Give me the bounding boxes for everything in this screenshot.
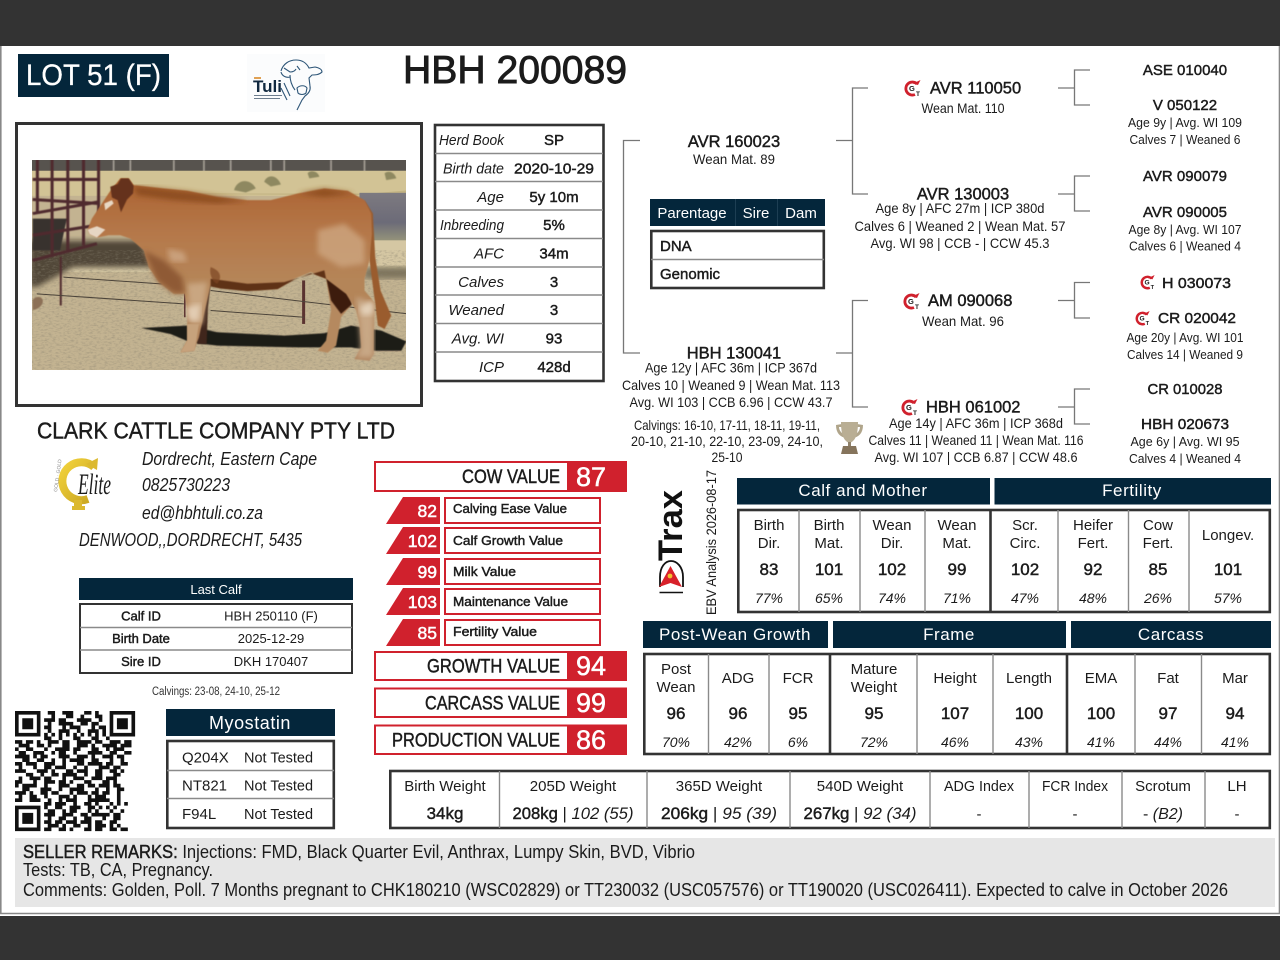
pedigree: sire AVR 160023: AVR 160023	[688, 133, 780, 151]
column: 365D weight: 206kg | 95 (39)	[661, 804, 777, 823]
icon: GT badge: G	[906, 403, 912, 412]
heading: post-wean growth	[643, 621, 828, 648]
panel: herd details table	[435, 125, 604, 381]
column: birth direct: 77%	[755, 590, 783, 606]
heading: carcass	[1071, 621, 1271, 648]
column: ADG	[722, 670, 754, 750]
pedigree: sire AVR 160023	[688, 133, 780, 167]
icon: GT badge	[1137, 311, 1150, 327]
column: FCR index	[1042, 778, 1108, 823]
panel: last calf	[79, 578, 353, 673]
panel: myostatin	[166, 709, 335, 828]
row: AFC	[473, 246, 569, 262]
column: wean direct	[873, 517, 911, 606]
value: fertility: 85	[418, 623, 437, 643]
row: ICP: ICP	[479, 359, 504, 376]
heading: calf and mother: Calf and Mother	[798, 481, 928, 500]
pedigree: AVR 130003: Calves 6 | Weaned 2 | Wean Mat. 57	[854, 218, 1066, 234]
column: height	[933, 670, 978, 750]
pedigree: dam HBH 130041	[622, 344, 840, 410]
column: birth maternal: 65%	[815, 590, 843, 606]
pedigree: HBH 061002: Avg. WI 107 | CCB 6.87 | CCW 48.6	[874, 449, 1078, 465]
panel: last calf: DKH 170407	[234, 654, 308, 669]
pedigree: AVR 090005: Age 8y | Avg. WI 107	[1128, 222, 1242, 237]
pedigree: CR 020042: Calves 14 | Weaned 9	[1127, 347, 1243, 362]
pedigree: HBH 061002: HBH 061002	[926, 398, 1020, 416]
pedigree: V 050122: Age 9y | Avg. WI 109	[1128, 115, 1242, 130]
panel: parentage: Genomic	[660, 266, 721, 283]
shadow	[141, 326, 406, 351]
pedigree: HBH 020673: Calves 4 | Weaned 4	[1129, 451, 1241, 466]
pedigree: AM 090068	[905, 292, 1012, 329]
column: ADG index	[944, 778, 1014, 823]
column: length: 43%	[1015, 734, 1043, 750]
icon: GT badge	[906, 80, 920, 98]
row: ICP: 428d	[537, 359, 571, 376]
value: growth value: 94	[576, 651, 606, 681]
column: scrotum	[1135, 778, 1191, 823]
value: production value	[375, 724, 627, 755]
column: birth maternal: Birth	[814, 517, 844, 534]
pedigree: AVR 130003	[854, 186, 1066, 251]
pedigree: HBH 061002	[868, 398, 1084, 465]
column: scrotal circumference: 102	[1011, 560, 1039, 579]
column: post wean: 96	[667, 704, 685, 723]
panel: myostatin: Not Tested	[244, 807, 313, 823]
value: milk	[386, 558, 600, 585]
column: height: Height	[933, 670, 978, 687]
column: birth direct: Birth	[754, 517, 784, 534]
panel: last calf: Birth Date	[112, 631, 170, 646]
pedigree: AVR 130003: Age 8y | AFC 27m | ICP 380d	[876, 200, 1044, 216]
pedigree: HBH 020673: HBH 020673	[1141, 416, 1229, 433]
column: cow fertility	[1143, 517, 1173, 606]
last calf calvings note: Calvings: 23-08, 24-10, 25-12	[152, 686, 280, 698]
column: 540D weight	[804, 778, 916, 823]
value: production value: PRODUCTION VALUE	[392, 730, 560, 752]
panel: myostatin: Not Tested	[244, 750, 313, 766]
row: average WI: Avg. WI	[451, 330, 504, 348]
column: heifer fertility	[1073, 517, 1113, 606]
value: carcass value: CARCASS VALUE	[425, 694, 560, 714]
pedigree: HBH 020673: Age 6y | Avg. WI 95	[1130, 434, 1240, 449]
row: average WI	[451, 330, 562, 348]
column: post wean: Wean	[657, 679, 695, 696]
row: inbreeding	[440, 217, 565, 234]
pedigree: sire AVR 160023: Wean Mat. 89	[693, 151, 775, 167]
column: scrotal circumference	[1010, 517, 1040, 606]
row: calves	[458, 274, 558, 291]
column: length: 100	[1015, 704, 1043, 723]
icon: GT badge: T	[1146, 321, 1150, 327]
table: weights and indexes	[390, 771, 1270, 828]
column: fat: 97	[1159, 704, 1177, 723]
column: ADG: ADG	[722, 670, 754, 687]
row: weaned: Weaned	[448, 302, 505, 319]
column: LH	[1227, 778, 1247, 823]
pedigree: AVR 110050: AVR 110050	[930, 80, 1021, 98]
icon: GT badge: T	[1151, 285, 1155, 291]
column: scrotal circumference: Circ.	[1010, 535, 1040, 552]
icon: GT badge	[1142, 275, 1155, 291]
row: inbreeding: Inbreeding	[440, 217, 505, 234]
column: scrotum: Scrotum	[1135, 778, 1191, 795]
column: heifer fertility: 92	[1084, 560, 1102, 579]
row: age	[476, 189, 579, 206]
value: fertility	[386, 619, 600, 646]
column: longevity: 101	[1214, 560, 1242, 579]
seller contact details	[79, 449, 317, 550]
column: scrotal circumference: Scr.	[1012, 517, 1038, 534]
column: marbling: Mar	[1222, 670, 1248, 687]
column: scrotum: - (B2)	[1143, 806, 1183, 823]
column: wean maternal: 99	[948, 560, 966, 579]
icon: GT badge: T	[916, 91, 920, 98]
logo: IDTrax	[652, 490, 690, 592]
icon: GT badge	[905, 293, 920, 311]
icon: GT badge: G	[1140, 316, 1145, 323]
logo: IDTrax: Trax	[652, 490, 690, 561]
EBV analysis date: EBV Analysis 2026-08-17	[703, 470, 719, 615]
column: FCR index: FCR Index	[1042, 778, 1108, 795]
pedigree: CR 010028: CR 010028	[1148, 381, 1222, 398]
heading: fertility	[994, 478, 1271, 504]
value: carcass value: 99	[576, 688, 606, 718]
panel: parentage	[650, 199, 825, 288]
bottom dark band	[0, 916, 1280, 960]
seller contact details: Dordrecht, Eastern Cape	[142, 449, 317, 469]
row: inbreeding: 5%	[543, 217, 565, 234]
pedigree: AM 090068: Wean Mat. 96	[922, 313, 1004, 329]
pedigree: H 030073: H 030073	[1162, 275, 1231, 292]
panel: parentage: Dam	[785, 205, 817, 222]
top dark band	[0, 0, 1280, 46]
value: cow value	[375, 461, 627, 492]
row: weaned	[448, 302, 558, 319]
column: ADG index: -	[976, 806, 982, 823]
panel: parentage: Sire	[743, 205, 769, 222]
pedigree: V 050122: V 050122	[1153, 97, 1217, 114]
column: wean maternal: 71%	[943, 590, 971, 606]
column: EMA	[1085, 670, 1117, 750]
pedigree: AVR 090079: AVR 090079	[1143, 168, 1227, 185]
column: heifer fertility: Fert.	[1078, 535, 1108, 552]
column: birth weight: 34kg	[427, 804, 463, 823]
pedigree: V 050122	[1128, 97, 1242, 147]
row: age: Age	[476, 189, 504, 206]
value: calf growth	[386, 527, 600, 554]
row: herd book	[439, 132, 564, 149]
value: maintenance	[386, 588, 600, 615]
panel: last calf: Calf ID	[121, 608, 161, 624]
value: carcass value	[375, 688, 627, 718]
pedigree: CR 020042: CR 020042	[1158, 310, 1236, 327]
column: birth direct: 83	[760, 560, 778, 579]
pedigree: CR 020042	[1126, 310, 1244, 362]
icon: trophy	[836, 422, 863, 454]
column: 540D weight: 267kg | 92 (34)	[804, 804, 916, 823]
QR code	[15, 713, 135, 829]
column: fat: 44%	[1154, 734, 1182, 750]
column: fat	[1154, 670, 1182, 750]
panel: myostatin: Not Tested	[244, 778, 313, 794]
column: birth weight	[404, 778, 487, 823]
column: birth direct	[754, 517, 784, 606]
seller contact details: ed@hbhtuli.co.za	[142, 503, 263, 523]
value: fertility: Fertility Value	[453, 624, 537, 639]
column: mature weight: 72%	[860, 734, 888, 750]
panel: parentage: Parentage	[657, 205, 727, 222]
value: growth value	[375, 651, 627, 681]
column: 205D weight: 205D Weight	[530, 778, 617, 795]
seller contact details: 0825730223	[142, 475, 230, 495]
value: calving ease: 82	[418, 501, 437, 521]
pedigree: AVR 090005: AVR 090005	[1143, 204, 1227, 221]
table: calf, mother and fertility EBVs	[738, 510, 1270, 612]
lot badge: LOT 51 (F)	[26, 59, 161, 92]
pedigree: ASE 010040: ASE 010040	[1143, 62, 1227, 79]
cage	[33, 159, 100, 306]
column: wean direct: Dir.	[881, 535, 903, 552]
pedigree: V 050122: Calves 7 | Weaned 6	[1130, 132, 1240, 147]
value: calving ease: Calving Ease Value	[453, 501, 567, 516]
logo: Elite: Elite	[77, 468, 111, 501]
column: LH: -	[1234, 806, 1240, 823]
column: wean direct: Wean	[873, 517, 911, 534]
value: cow value: COW VALUE	[462, 467, 560, 488]
row: herd book: Herd Book	[439, 132, 505, 149]
heading: carcass: Carcass	[1138, 625, 1204, 644]
row: ICP	[479, 359, 571, 376]
panel: last calf: Last Calf	[190, 582, 242, 597]
dam calving history: Calvings: 16-10, 17-11, 18-11, 19-11,	[634, 417, 820, 433]
column: heifer fertility: 48%	[1079, 590, 1107, 606]
pedigree: HBH 061002: Age 14y | AFC 36m | ICP 368d	[889, 415, 1063, 431]
column: 205D weight: 208kg | 102 (55)	[512, 804, 634, 823]
tail	[364, 200, 391, 329]
far legs	[197, 284, 211, 344]
logo: Elite	[53, 458, 111, 510]
row: average WI: 93	[546, 330, 562, 348]
column: ADG: 96	[729, 704, 747, 723]
column: wean direct: 102	[878, 560, 906, 579]
icon: GT badge	[903, 399, 918, 417]
pedigree: AVR 110050	[906, 80, 1021, 116]
column: height: 107	[941, 704, 969, 723]
column: FCR: 95	[789, 704, 807, 723]
body	[88, 178, 375, 361]
icon: GT badge: T	[913, 410, 917, 417]
row: calves: 3	[550, 274, 558, 291]
column: 540D weight: 540D Weight	[817, 778, 904, 795]
column: ADG index: ADG Index	[944, 778, 1014, 795]
pedigree: HBH 061002: Calves 11 | Weaned 11 | Wean Mat. 116	[868, 432, 1084, 448]
pedigree: AVR 090005: Calves 6 | Weaned 4	[1129, 238, 1241, 254]
heading: frame: Frame	[923, 625, 975, 644]
column: height: 46%	[941, 734, 969, 750]
pedigree: AM 090068: AM 090068	[928, 292, 1012, 310]
logo: Tuli cattle: Tuli	[253, 77, 282, 96]
column: birth maternal	[814, 517, 844, 606]
pedigree connector lines	[624, 70, 1090, 424]
icon: GT badge: G	[908, 297, 914, 306]
table: growth, frame and carcass EBVs	[644, 654, 1270, 754]
value: growth value: GROWTH VALUE	[427, 656, 560, 678]
pedigree: AVR 130003: AVR 130003	[917, 186, 1009, 204]
row: age: 5y 10m	[529, 189, 579, 206]
pedigree: dam HBH 130041: Calves 10 | Weaned 9 | Wean Mat. 113	[622, 377, 840, 393]
pedigree: dam HBH 130041: HBH 130041	[687, 344, 781, 362]
value: milk: Milk Value	[453, 564, 516, 579]
column: cow fertility: Cow	[1143, 517, 1173, 534]
column: cow fertility: Fert.	[1143, 535, 1173, 552]
pedigree: dam HBH 130041: Age 12y | AFC 36m | ICP 367d	[645, 360, 817, 376]
column: FCR: 6%	[788, 734, 808, 750]
value: production value: 86	[576, 725, 606, 755]
panel: myostatin: NT821	[182, 778, 227, 794]
seller contact details: DENWOOD,,DORDRECHT, 5435	[79, 530, 303, 550]
column: mature weight: Weight	[851, 679, 898, 696]
column: marbling: 94	[1226, 704, 1244, 723]
value: cow value: 87	[576, 462, 606, 492]
column: 365D weight	[661, 778, 777, 823]
column: wean maternal: Wean	[938, 517, 976, 534]
column: marbling	[1221, 670, 1249, 750]
column: post wean	[657, 661, 695, 750]
shading	[318, 224, 364, 267]
panel: seller remarks: Tests: TB, CA, Pregnancy.	[23, 860, 213, 880]
column: birth maternal: 101	[815, 560, 843, 579]
panel: cow photo	[16, 124, 422, 406]
column: fat: Fat	[1157, 670, 1180, 687]
column: mature weight: 95	[865, 704, 883, 723]
column: birth maternal: Mat.	[814, 535, 844, 552]
column: post wean: Post	[661, 661, 692, 678]
pedigree: AVR 110050: Wean Mat. 110	[922, 100, 1005, 116]
column: cow fertility: 85	[1149, 560, 1167, 579]
panel: last calf: 2025-12-29	[238, 631, 304, 646]
dam calving history: 25-10	[712, 449, 743, 465]
column: 205D weight	[512, 778, 634, 823]
pedigree: AVR 090005	[1128, 204, 1242, 254]
column: length	[1006, 670, 1052, 750]
column: heifer fertility: Heifer	[1073, 517, 1113, 534]
column: FCR: FCR	[783, 670, 814, 687]
pedigree: AVR 130003: Avg. WI 98 | CCB - | CCW 45.3	[870, 235, 1050, 251]
column: mature weight	[851, 661, 898, 750]
row: birth date: Birth date	[443, 160, 504, 178]
column: 365D weight: 365D Weight	[676, 778, 763, 795]
column: wean maternal: Mat.	[942, 535, 972, 552]
value: calf growth: Calf Growth Value	[453, 533, 563, 548]
panel: myostatin: Q204X	[182, 750, 229, 766]
heading: frame	[833, 621, 1066, 648]
column: mature weight: Mature	[851, 661, 897, 678]
icon: GT badge: G	[909, 84, 915, 93]
column: EMA: 41%	[1087, 734, 1115, 750]
column: LH: LH	[1227, 778, 1247, 795]
column: longevity: 57%	[1214, 590, 1242, 606]
column: EMA: EMA	[1085, 670, 1117, 687]
column: longevity	[1202, 527, 1254, 606]
row: weaned: 3	[550, 302, 558, 319]
panel: last calf: Sire ID	[121, 654, 161, 669]
value: milk: 99	[418, 562, 437, 582]
panel: last calf: HBH 250110 (F)	[224, 608, 318, 624]
column: FCR index: -	[1072, 806, 1078, 823]
title: HBH 200089	[403, 49, 627, 92]
row: calves: Calves	[458, 274, 504, 291]
heading: post-wean growth: Post-Wean Growth	[659, 625, 811, 644]
heading: calf and mother	[737, 478, 990, 504]
column: scrotal circumference: 47%	[1011, 590, 1039, 606]
row: birth date: 2020-10-29	[514, 160, 594, 178]
icon: GT badge: T	[915, 304, 919, 311]
column: post wean: 70%	[662, 734, 690, 750]
pedigree: CR 020042: Age 20y | Avg. WI 101	[1126, 330, 1244, 345]
row: herd book: SP	[544, 132, 564, 149]
value: maintenance: 103	[408, 592, 437, 612]
value: calving ease	[386, 497, 600, 524]
heading: fertility: Fertility	[1102, 481, 1162, 500]
column: wean maternal	[938, 517, 976, 606]
column: marbling: 41%	[1221, 734, 1249, 750]
logo: Tuli cattle	[247, 54, 325, 112]
value: maintenance: Maintenance Value	[453, 594, 568, 609]
value: calf growth: 102	[408, 531, 437, 551]
column: birth direct: Dir.	[758, 535, 780, 552]
panel: myostatin: Myostatin	[209, 713, 291, 733]
column: wean direct: 74%	[878, 590, 906, 606]
panel: seller remarks: SELLER REMARKS: Injections: FMD, Black Quarter Evil, Anthrax, Lumpy Skin, BVD, Vibrio	[23, 842, 695, 862]
column: birth weight: Birth Weight	[404, 778, 487, 795]
pedigree: dam HBH 130041: Avg. WI 103 | CCB 6.96 | CCW 43.7	[630, 394, 833, 410]
panel: seller remarks	[15, 838, 1275, 907]
column: EMA: 100	[1087, 704, 1115, 723]
panel: parentage: DNA	[660, 238, 692, 255]
row: AFC: AFC	[473, 246, 504, 262]
panel: myostatin: F94L	[182, 806, 216, 823]
column: FCR	[783, 670, 814, 750]
column: ADG: 42%	[724, 734, 752, 750]
dam calving history	[631, 417, 823, 465]
ear	[110, 178, 134, 212]
photo of cow	[30, 159, 410, 371]
column: longevity: Longev.	[1202, 527, 1254, 544]
seller name: CLARK CATTLE COMPANY PTY LTD	[37, 418, 395, 444]
column: length: Length	[1006, 670, 1052, 687]
icon: GT badge: G	[1145, 280, 1150, 287]
dam calving history: 20-10, 21-10, 22-10, 23-09, 24-10,	[631, 433, 823, 449]
pedigree: HBH 020673	[1129, 416, 1241, 466]
row: AFC: 34m	[539, 246, 569, 262]
column: cow fertility: 26%	[1143, 590, 1172, 606]
logo: Elite: GOLD · GOLD	[53, 459, 64, 492]
row: birth date	[443, 160, 594, 178]
